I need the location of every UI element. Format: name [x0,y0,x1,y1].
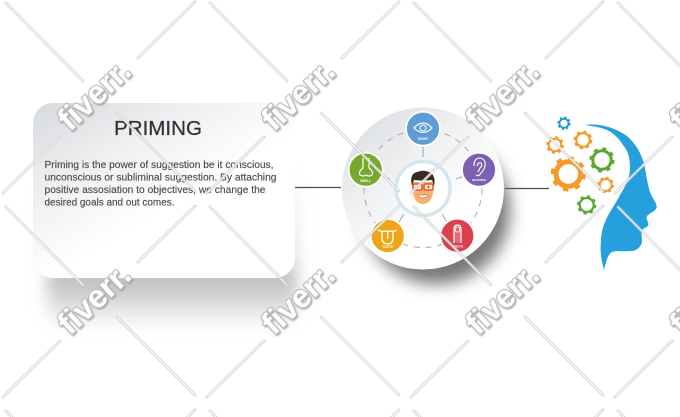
watermark: fiverr logos [50,52,680,341]
icon: sight [406,112,440,146]
icon: sight: SIGHT [418,137,428,141]
text block: definition: desired goals and out comes. [44,196,174,208]
icon: taste [371,219,405,253]
icon: smell [349,153,383,187]
connector: card to senses wheel [295,186,341,188]
icon: big orange gear [552,158,584,190]
text block: definition: Priming is the power of suggestion be it conscious, [44,159,274,171]
watermark: fiverr logos: fiverr. [254,256,342,341]
icon: orange gear small right [598,178,613,192]
watermark: fiverr logos: fiverr. [50,256,138,341]
icon: smell: SMELL [360,179,371,183]
text block: definition [44,159,277,208]
icon: hearing: HEARING [472,178,487,182]
icon: green gear bottom [578,196,596,214]
watermark: fiverr logos: fiverr. [458,52,546,137]
icon: head silhouette [585,125,657,270]
text block: definition: positive assosiation to objectives, we change the [44,184,266,196]
icon: touch: TOUCH [451,244,464,248]
icon: orange gear small left [547,137,563,153]
text block: definition: unconscious or subliminal suggestion. By attaching [44,172,277,184]
icon: face with red glasses [411,171,435,204]
icon: taste: TASTE [382,245,394,249]
watermark: fiverr logos: fiverr. [458,256,546,341]
watermark: fiverr logos: fiverr. [254,52,342,137]
connector: senses wheel to head [505,188,549,190]
icon: blue gear [558,118,570,129]
panel: senses wheel [342,108,510,284]
icon: green gear large [590,148,614,172]
illustration: head with gears [547,118,657,270]
watermark: fiverr logos: fiverr. [50,52,138,137]
icon: touch [440,219,474,253]
icon: hearing [462,153,496,187]
heading: priming: PRIMING [114,118,202,140]
panel: priming card [33,103,297,326]
icon: orange gear top [574,132,592,148]
